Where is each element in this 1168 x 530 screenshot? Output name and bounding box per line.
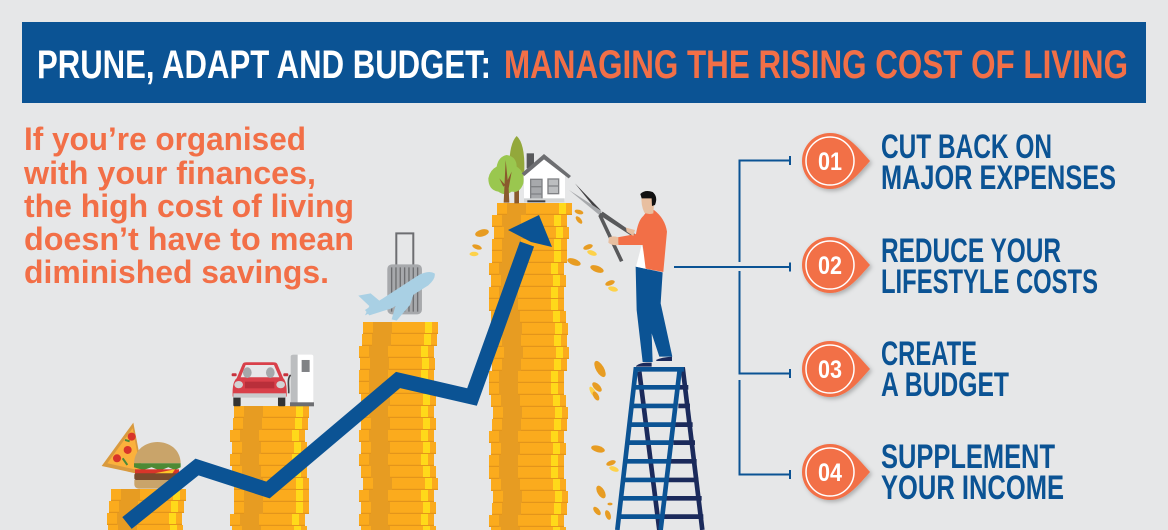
coin stack 1: [107, 489, 186, 530]
badge 01: [802, 133, 870, 189]
badge 02: 02: [818, 252, 842, 280]
icon: burger: [134, 442, 181, 489]
intro text block: the high cost of living: [24, 188, 354, 224]
icon: house: [522, 153, 571, 202]
item 03 heading: A BUDGET: [881, 366, 1009, 404]
shoes and trousers: [636, 267, 672, 367]
intro text block: doesn’t have to mean: [24, 221, 354, 257]
item 04 heading: [881, 438, 1064, 507]
item 01 heading: CUT BACK ON: [881, 128, 1052, 166]
intro text block: with your finances,: [23, 155, 316, 191]
falling coins: [470, 209, 620, 521]
intro text block: diminished savings.: [24, 254, 329, 290]
icon: aeroplane: [358, 272, 435, 321]
coin stack 3: [359, 322, 438, 530]
icon: pizza slice: [102, 423, 143, 475]
icon: red car: [232, 362, 288, 406]
item 01 heading: [881, 128, 1116, 197]
icon: man pruning with shears: [569, 183, 672, 367]
item 03 heading: [881, 335, 1009, 404]
torso and arm: [608, 210, 667, 272]
icon: ladder: [617, 367, 703, 530]
intro text block: If you’re organised: [24, 121, 306, 157]
head: [640, 191, 656, 214]
badge 04: 04: [818, 459, 842, 487]
badge 04: [802, 444, 870, 500]
badge 03: [802, 341, 870, 397]
title banner: PRUNE, ADAPT AND BUDGET:: [37, 43, 491, 87]
growth arrow: [127, 215, 552, 523]
icon: tree: [488, 136, 524, 203]
item 04 heading: YOUR INCOME: [881, 469, 1064, 507]
icon: fuel pump: [288, 355, 314, 406]
badge 02: [802, 237, 870, 293]
coin stack 2: [230, 406, 309, 530]
intro text block: [23, 121, 354, 290]
badge 03: 03: [818, 356, 842, 384]
item 02 heading: REDUCE YOUR: [881, 232, 1061, 270]
shears: [569, 183, 635, 262]
item 02 heading: [881, 232, 1098, 301]
item 04 heading: SUPPLEMENT: [881, 438, 1055, 476]
connector bracket: [674, 156, 790, 479]
badge 01: 01: [818, 148, 842, 176]
icon: suitcase: [387, 233, 422, 314]
item 03 heading: CREATE: [881, 335, 977, 373]
title banner: [22, 22, 1146, 103]
coin stack 4: [489, 203, 572, 530]
